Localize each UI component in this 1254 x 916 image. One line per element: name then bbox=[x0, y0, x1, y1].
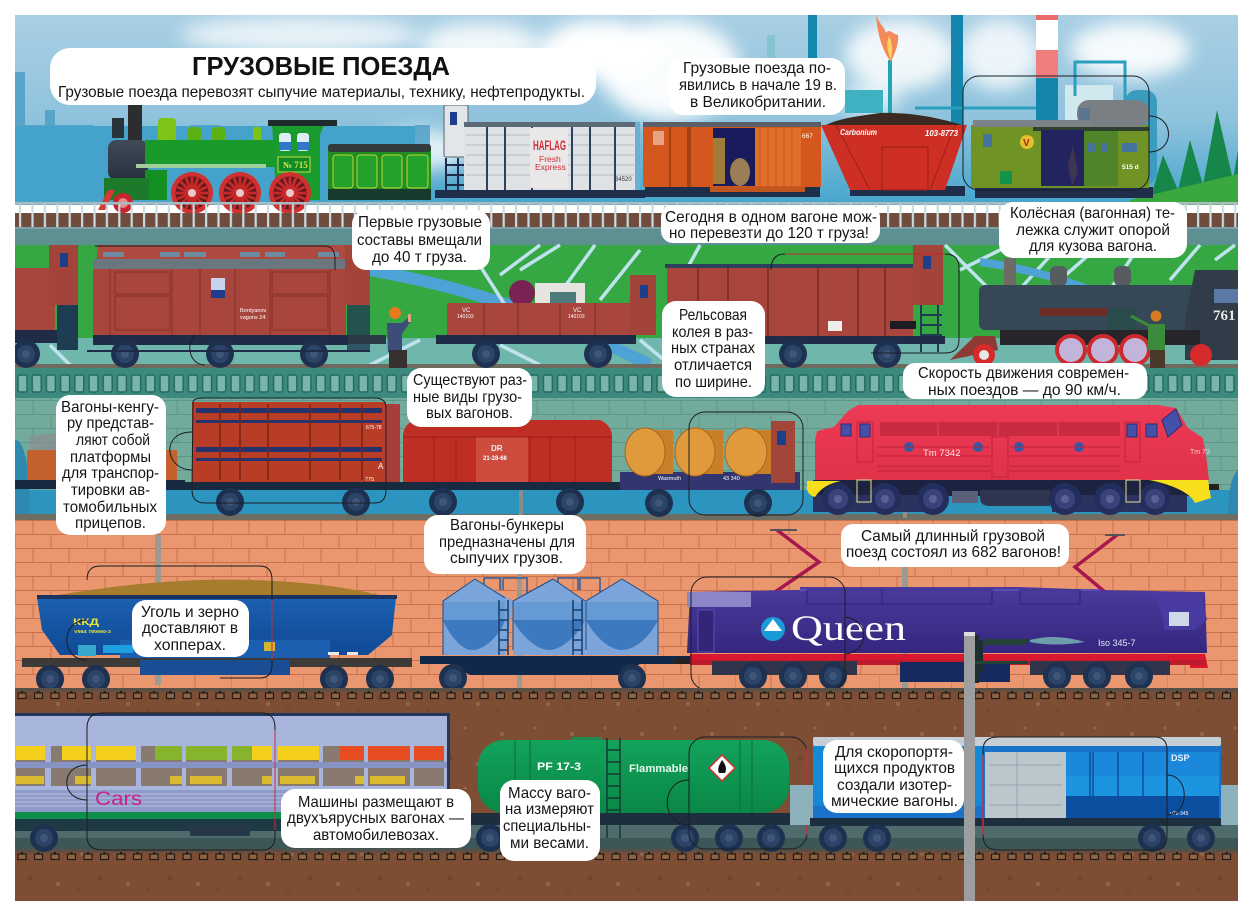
red hopper Carbonium: Carbonium bbox=[840, 128, 877, 137]
callout: bunker wagons: сыпучих грузов. bbox=[450, 550, 563, 567]
panel: train row 4 bbox=[15, 520, 1238, 693]
purple Queen electric locomotive: Iso 345-7 bbox=[1098, 638, 1136, 648]
callout: hoppers: хопперах. bbox=[154, 637, 226, 654]
red DR wagon bbox=[403, 420, 612, 482]
callout: rail gauge: отличается bbox=[674, 357, 752, 374]
brown covered wagon: Bordyanov bbox=[240, 308, 267, 314]
callout: wagon weight: специальны- bbox=[503, 818, 591, 835]
callout: car carriers: Машины размещают в bbox=[298, 794, 454, 811]
red diesel locomotive: Tm 73 bbox=[1190, 449, 1210, 456]
red stock wagon: A bbox=[378, 462, 384, 471]
green steam locomotive bbox=[98, 105, 337, 214]
callout: rail gauge bbox=[662, 301, 765, 397]
white boxcar HAFLAG: Fresh bbox=[539, 154, 561, 164]
blue hopper wagon bbox=[22, 566, 412, 693]
callout: first freight trains appeared: Грузовые поезда по- bbox=[683, 60, 831, 77]
red hopper Carbonium bbox=[821, 113, 967, 196]
green tank wagon: PF 17-3 bbox=[537, 761, 581, 773]
callout: isothermal wagons: создали изотер- bbox=[837, 777, 952, 794]
red stock wagon: 775 bbox=[365, 477, 374, 483]
car carrier wagon bbox=[15, 713, 450, 852]
panel: train row 3 bbox=[15, 398, 1238, 520]
green tank wagon bbox=[470, 737, 813, 852]
trees bbox=[1150, 110, 1238, 200]
gondola behind bubble bbox=[15, 433, 185, 489]
flat wagon with machine: VC bbox=[573, 308, 582, 314]
dark steam locomotive bbox=[950, 258, 1238, 368]
callout: today capacity bbox=[661, 205, 880, 243]
green caboose bbox=[971, 100, 1153, 198]
callout: hoppers bbox=[132, 600, 249, 657]
callout: first trains capacity: Первые грузовые bbox=[358, 214, 482, 231]
orange boxcar: 667 bbox=[802, 133, 813, 140]
signal pole bbox=[964, 632, 1030, 901]
callout: wheel bogie: лежка служит опорой bbox=[1016, 222, 1170, 239]
red stock wagon bbox=[192, 402, 400, 483]
red diesel locomotive bbox=[807, 405, 1219, 515]
callout: longest train: поезд состоял из 682 вагонов! bbox=[846, 544, 1061, 561]
callout: first freight trains appeared: явились в начале 19 в. bbox=[679, 77, 837, 94]
red hopper Carbonium: 103-8773 bbox=[925, 129, 959, 138]
barrel wagon: Wasmuth bbox=[658, 476, 681, 482]
callout: bunker wagons: Вагоны-бункеры bbox=[450, 517, 564, 534]
callout: isothermal wagons: щихся продуктов bbox=[834, 760, 955, 777]
callout: first trains capacity: до 40 т груза. bbox=[372, 249, 467, 266]
barrel wagon: 43 340 bbox=[723, 476, 740, 482]
blue hopper wagon: V984 780660-2 bbox=[74, 629, 112, 634]
callout: rail gauge: колея в раз- bbox=[672, 324, 753, 341]
callout: car carriers: автомобилевозах. bbox=[313, 827, 439, 844]
bridge windows strip bbox=[15, 368, 1238, 398]
rails with ties bbox=[15, 688, 1238, 861]
green tank wagon: Flammable bbox=[629, 763, 688, 775]
brown covered wagon bbox=[87, 245, 386, 368]
callout: kangaroo wagons: томобильных bbox=[63, 499, 157, 516]
callout: speed bbox=[903, 363, 1147, 399]
callout: isothermal wagons bbox=[823, 740, 964, 813]
refrigerated wagon: DSP bbox=[1171, 753, 1190, 763]
red stock wagon: 675-78 bbox=[366, 425, 382, 431]
callout: car carriers: двухъярусных вагонах — bbox=[287, 810, 464, 827]
panel: train row 1 bbox=[98, 76, 1168, 214]
callout: hoppers: Уголь и зерно bbox=[141, 604, 239, 621]
refrigerated wagon: ruddychnik 12 bbox=[866, 820, 895, 825]
callout: bunker wagons bbox=[424, 515, 586, 574]
title: ГРУЗОВЫЕ ПОЕЗДА bbox=[192, 51, 450, 81]
callout: today capacity: Сегодня в одном вагоне мож- bbox=[665, 209, 877, 226]
callout: hoppers: доставляют в bbox=[142, 620, 238, 637]
callout: longest train: Самый длинный грузовой bbox=[861, 528, 1045, 545]
callout: rail gauge: по ширине. bbox=[675, 374, 752, 391]
callout: wagon weight: Массу ваго- bbox=[508, 785, 591, 802]
refrigerated wagon: u71-345 bbox=[1170, 811, 1189, 817]
callout: kangaroo wagons: для транспор- bbox=[62, 465, 159, 482]
tender bbox=[328, 144, 431, 200]
callout: wheel bogie: для кузова вагона. bbox=[1029, 238, 1157, 255]
panel: bridge green background bbox=[15, 228, 1238, 368]
fence bbox=[15, 202, 1238, 229]
callout: kangaroo wagons: платформы bbox=[70, 449, 151, 466]
callout: first trains capacity: составы вмещали bbox=[357, 232, 482, 249]
icon: flammable diamond bbox=[709, 755, 735, 781]
callout: wagon types: Существуют раз- bbox=[413, 372, 527, 389]
callout: wagon types bbox=[407, 368, 532, 427]
brown covered wagon: vagons 24 bbox=[240, 315, 265, 321]
white boxcar HAFLAG: Express bbox=[535, 162, 566, 172]
green steam locomotive: № 715 bbox=[283, 160, 308, 170]
panel: train row 2 bbox=[12, 245, 1238, 368]
callout: kangaroo wagons: Вагоны-кенгу- bbox=[61, 399, 159, 416]
silo wagon bbox=[420, 578, 694, 692]
worker with clipboard bbox=[1131, 310, 1165, 368]
callout: rail gauge: ных странах bbox=[671, 340, 755, 357]
red DR wagon: DR bbox=[491, 444, 503, 453]
callout: wheel bogie: Колёсная (вагонная) те- bbox=[1010, 205, 1175, 222]
callout: speed: Скорость движения современ- bbox=[918, 365, 1129, 382]
callout: rail gauge: Рельсовая bbox=[679, 307, 747, 324]
left brown wagon bbox=[12, 245, 78, 368]
callout: speed: ных поездов — до 90 км/ч. bbox=[928, 382, 1121, 399]
green caboose: V bbox=[1023, 138, 1030, 149]
callout: kangaroo wagons: тировки ав- bbox=[71, 482, 150, 499]
panel: soil ground bbox=[15, 690, 1238, 901]
pantographs bbox=[775, 530, 1117, 597]
callout: isothermal wagons: мические вагоны. bbox=[831, 793, 958, 810]
car carrier wagon: Cars bbox=[95, 789, 142, 810]
white boxcar HAFLAG: 34520 bbox=[615, 177, 632, 183]
purple Queen electric locomotive bbox=[687, 530, 1208, 690]
callout: longest train bbox=[841, 524, 1069, 567]
orange boxcar bbox=[643, 122, 821, 197]
callout: first freight trains appeared: в Великобритании. bbox=[690, 94, 826, 111]
callout: kangaroo wagons: ру представ- bbox=[67, 415, 154, 432]
callout: today capacity: но перевезти до 120 т груза! bbox=[669, 225, 869, 242]
red DR wagon: 21-28-66 bbox=[483, 456, 508, 462]
purple Queen electric locomotive: Queen bbox=[791, 608, 906, 648]
flat wagon with machine: 140103 bbox=[457, 314, 474, 320]
white boxcar HAFLAG bbox=[435, 105, 645, 198]
callout: isothermal wagons: Для скоропортя- bbox=[835, 744, 953, 761]
flat wagon with machine bbox=[436, 275, 656, 368]
green caboose: 515 d bbox=[1122, 164, 1139, 171]
flat wagon with machine: VC bbox=[462, 308, 471, 314]
callout: first freight trains appeared bbox=[669, 58, 845, 115]
barrel wagon bbox=[620, 412, 803, 517]
blue hopper wagon: ККД bbox=[73, 617, 100, 627]
logo bbox=[761, 617, 785, 641]
callout: wagon weight: на измеряют bbox=[505, 801, 595, 818]
callout: kangaroo wagons: прицепов. bbox=[75, 515, 146, 532]
worker in helmet bbox=[387, 307, 411, 368]
white boxcar HAFLAG: HAFLAG bbox=[533, 137, 566, 153]
callout: wheel bogie bbox=[999, 202, 1187, 258]
callout: wagon weight: ми весами. bbox=[510, 835, 589, 852]
brown gondola bbox=[665, 245, 959, 368]
subtitle: Грузовые поезда перевозят сыпучие материалы, технику, нефтепродукты. bbox=[58, 84, 585, 101]
panel: sky and industrial background bbox=[15, 15, 1238, 205]
callout: kangaroo wagons bbox=[56, 395, 166, 535]
callout: wagon weight bbox=[500, 780, 600, 861]
icon: flare bbox=[876, 15, 898, 62]
flat wagon with machine: 140103 bbox=[568, 314, 585, 320]
callout: car carriers bbox=[281, 789, 471, 848]
title block bbox=[50, 48, 596, 105]
callout: first trains capacity bbox=[352, 210, 490, 270]
callout: bunker wagons: предназначены для bbox=[439, 534, 575, 551]
red diesel locomotive: Tm 7342 bbox=[923, 448, 960, 459]
panel: train row 5 bbox=[15, 713, 1238, 852]
callout: wagon types: вых вагонов. bbox=[426, 405, 513, 422]
refrigerated wagon bbox=[810, 737, 1238, 852]
dark steam locomotive: 761 bbox=[1213, 308, 1236, 324]
callout: kangaroo wagons: ляют собой bbox=[76, 432, 150, 449]
callout: wagon types: ные виды грузо- bbox=[413, 389, 522, 406]
